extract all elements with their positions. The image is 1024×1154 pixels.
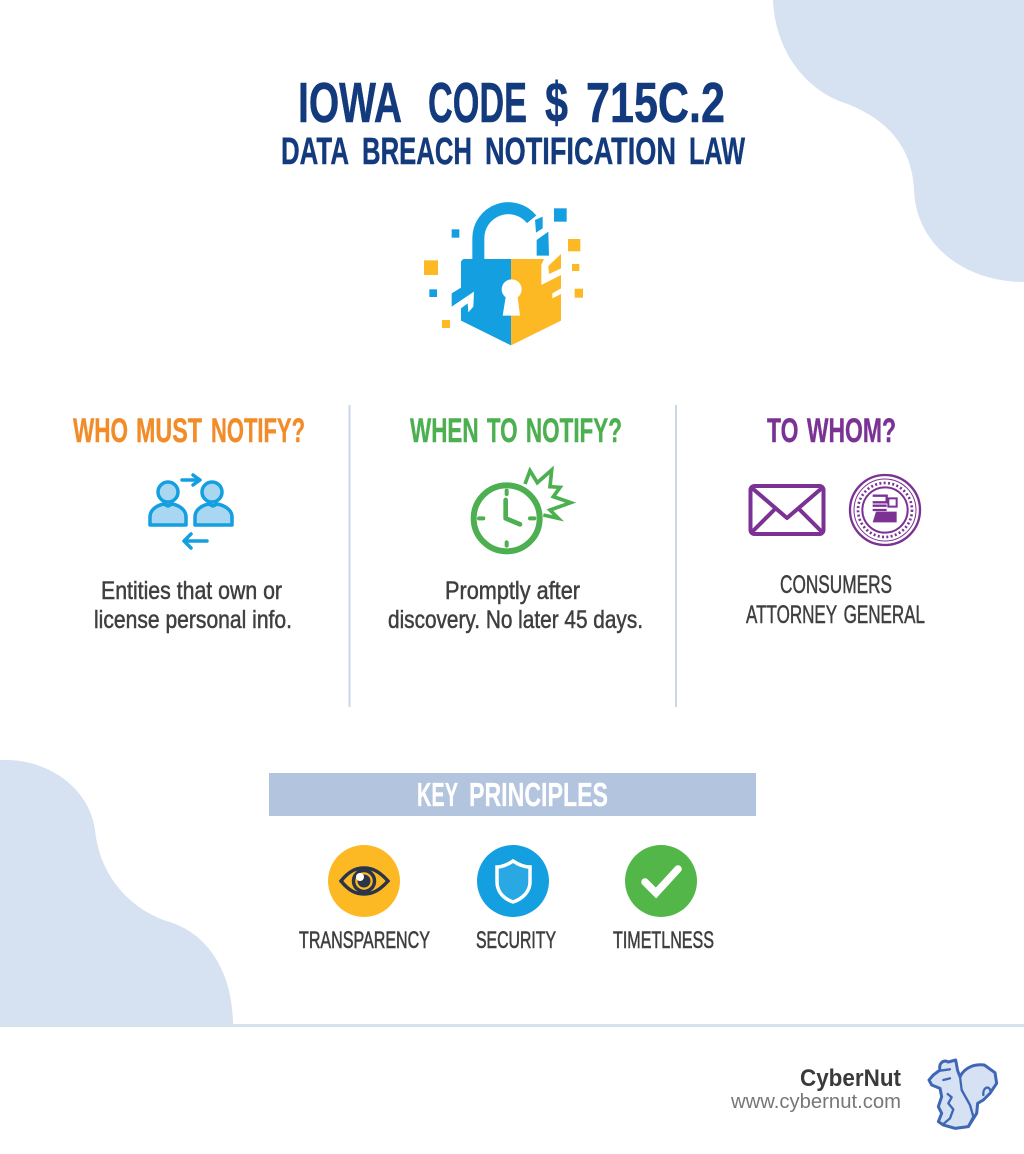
text: to whom — [746, 571, 925, 629]
key principles banner: PRINCIPLES — [469, 776, 608, 813]
heading: who must notify — [73, 412, 305, 450]
text: who must notify: Entities that own or — [101, 577, 282, 605]
subtitle: BREACH — [362, 131, 472, 173]
panel: when to notify — [388, 412, 643, 634]
principle: transparency — [299, 845, 430, 954]
text: to whom: ATTORNEY GENERAL — [746, 601, 925, 629]
text: when to notify: discovery. No later 45 days. — [388, 606, 643, 634]
text: who must notify: license personal info. — [94, 606, 292, 634]
brand name: CyberNut — [800, 1065, 901, 1092]
icon: two people exchanging arrows — [150, 475, 232, 548]
background blob: top right — [773, 0, 1024, 282]
principle: transparency: TRANSPARENCY — [299, 927, 430, 954]
principle: timeliness — [613, 845, 714, 954]
icon: squirrel logo — [929, 1060, 997, 1128]
icon: envelope — [750, 486, 824, 534]
principle: timeliness: TIMETLNESS — [613, 927, 714, 954]
title — [298, 71, 725, 135]
principle: security — [476, 845, 556, 954]
panel: to whom — [746, 412, 925, 629]
icon: shield — [477, 845, 549, 917]
text: to whom: CONSUMERS — [780, 571, 892, 599]
column dividers — [350, 405, 676, 707]
key principles banner — [269, 773, 756, 816]
title: CODE — [428, 71, 527, 135]
panel: who must notify — [73, 412, 305, 634]
icon: attorney general seal — [850, 475, 920, 545]
text: when to notify: Promptly after — [445, 577, 580, 605]
icon: check mark — [625, 845, 697, 917]
principle: security: SECURITY — [476, 927, 556, 954]
subtitle — [281, 131, 745, 173]
heading: when to notify: WHEN TO NOTIFY? — [410, 412, 622, 450]
heading: who must notify: MUST — [136, 412, 202, 450]
heading: who must notify: WHO — [73, 412, 128, 450]
subtitle: DATA — [281, 131, 349, 173]
text: when to notify — [388, 577, 643, 634]
heading: who must notify: NOTIFY? — [211, 412, 305, 450]
title: 715C.2 — [586, 71, 725, 135]
subtitle: NOTIFICATION — [485, 131, 676, 173]
icon: broken padlock — [424, 208, 583, 345]
text: who must notify — [94, 577, 292, 634]
heading: to whom: TO WHOM? — [767, 412, 896, 450]
brand url: www.cybernut.com — [730, 1091, 901, 1113]
subtitle: LAW — [689, 131, 745, 173]
icon: clock with burst — [474, 470, 571, 551]
footer — [0, 1024, 1024, 1128]
title: IOWA — [298, 71, 402, 135]
title: $ — [545, 71, 568, 135]
background blob: bottom left — [0, 760, 233, 1025]
key principles banner: KEY — [417, 776, 458, 813]
icon: eye — [328, 845, 400, 917]
